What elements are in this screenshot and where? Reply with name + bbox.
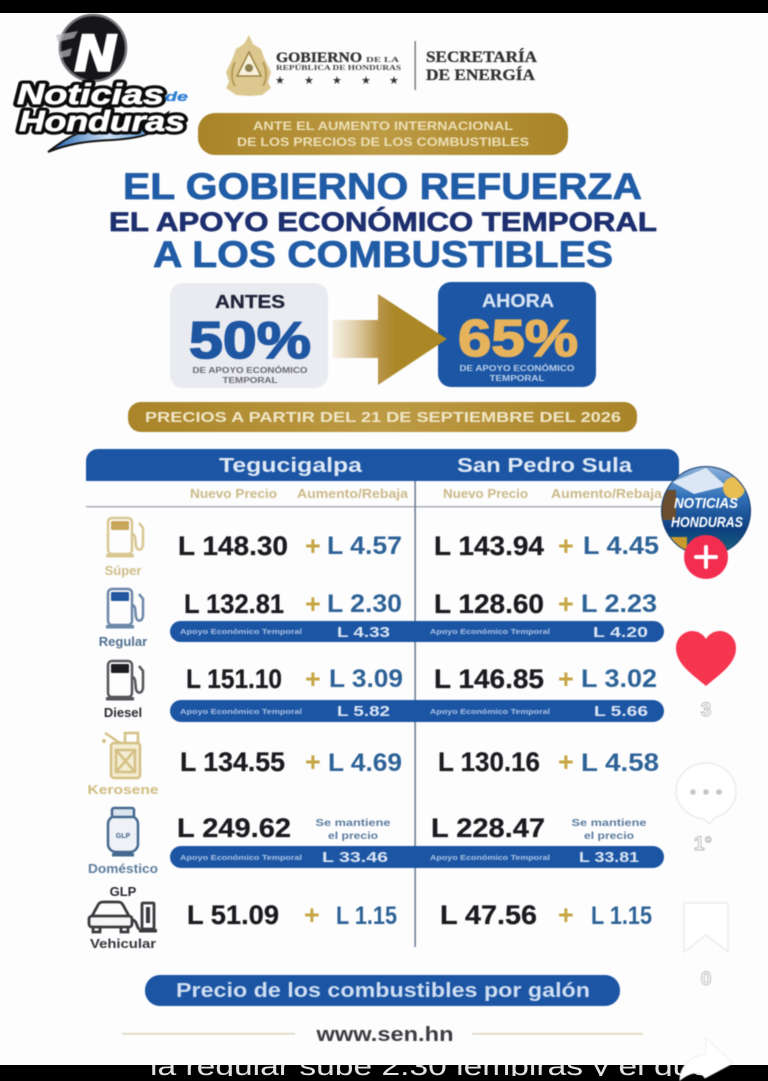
support pill: Regular: L 4.33 bbox=[337, 624, 390, 641]
ministry name: Gobierno: REPÚBLICA DE HONDURAS bbox=[276, 64, 401, 72]
title: A LOS COMBUSTIBLES bbox=[153, 234, 613, 275]
ministry name: Gobierno: GOBIERNO bbox=[276, 50, 362, 66]
support pill: Diesel: L 5.66 bbox=[594, 703, 648, 720]
row: Diesel: Diesel bbox=[104, 705, 142, 720]
row: GLP Vehicular: L 51.09 bbox=[187, 900, 279, 930]
row: GLP Doméstico: L 249.62 bbox=[177, 813, 291, 843]
ministry name: Gobierno: ★ bbox=[361, 75, 371, 87]
icon: heart bbox=[676, 631, 736, 686]
support pill: Diesel: Apoyo Económico Temporal bbox=[430, 709, 550, 716]
row: Súper: L 143.94 bbox=[434, 531, 544, 561]
icon: channel avatar: NOTICIAS bbox=[674, 495, 738, 512]
comments count: 1° bbox=[694, 834, 712, 855]
icon: bookmark bbox=[684, 903, 728, 952]
logo wordmark: de bbox=[165, 89, 188, 104]
panel: ahora 65%: 65% bbox=[458, 310, 578, 368]
column sub-headings: Nuevo Precio bbox=[190, 486, 277, 501]
row: GLP Doméstico: Se mantiene bbox=[316, 817, 391, 829]
support pill: Regular bbox=[170, 621, 664, 642]
logo wordmark bbox=[17, 79, 188, 138]
icon: kerosene jerry can bbox=[102, 733, 140, 778]
row: GLP Doméstico: L 228.47 bbox=[431, 813, 545, 843]
ministry name: Secretaría de Energía bbox=[426, 47, 537, 84]
row: Regular: L 2.23 bbox=[581, 590, 657, 618]
icon: follow plus bbox=[684, 535, 728, 579]
title: EL APOYO ECONÓMICO TEMPORAL bbox=[109, 206, 657, 237]
icon: blue fuel pump bbox=[106, 589, 143, 628]
ministry name: Secretaría de Energía: DE ENERGÍA bbox=[426, 65, 535, 84]
panel: ahora 65%: DE APOYO ECONÓMICO bbox=[460, 364, 574, 373]
row: Kerosene: Kerosene bbox=[88, 782, 158, 797]
row: Súper bbox=[105, 518, 659, 578]
logo: Noticias de Honduras bbox=[17, 15, 188, 152]
row: Regular: L 2.30 bbox=[327, 590, 402, 618]
ministry name: Gobierno bbox=[275, 50, 401, 87]
row: Súper: L 4.45 bbox=[583, 532, 659, 560]
title: EL GOBIERNO REFUERZA bbox=[123, 166, 642, 207]
row: GLP Doméstico: el precio bbox=[584, 830, 634, 842]
support pill: Doméstico: L 33.46 bbox=[322, 849, 388, 866]
support pill: Regular: L 4.20 bbox=[593, 624, 648, 641]
row: Kerosene: L 4.69 bbox=[328, 749, 402, 777]
icon: share arrow bbox=[680, 1038, 733, 1080]
row: Diesel: + bbox=[305, 664, 321, 694]
row: Kerosene: + bbox=[558, 747, 574, 777]
saves count: 0 bbox=[701, 969, 711, 990]
icon: national crest bbox=[226, 35, 271, 96]
icon: N badge bbox=[56, 15, 126, 83]
gold banner: effective date: PRECIOS A PARTIR DEL 21 DE SEPTIEMBRE DEL 2026 bbox=[145, 409, 621, 426]
gold banner: international increase: DE LOS PRECIOS DE LOS COMBUSTIBLES bbox=[237, 137, 529, 149]
icon: N badge: N bbox=[74, 25, 118, 83]
row: GLP Vehicular: L 1.15 bbox=[336, 902, 397, 930]
row: Regular: + bbox=[305, 589, 321, 619]
website: www.sen.hn bbox=[315, 1024, 454, 1046]
logo wordmark: Honduras bbox=[19, 106, 185, 138]
row: Súper: + bbox=[558, 531, 574, 561]
column sub-headings: Aumento/Rebaja bbox=[551, 486, 663, 501]
footer banner: price per gallon bbox=[145, 975, 620, 1006]
row: Súper: L 4.57 bbox=[327, 532, 402, 560]
row: GLP Doméstico: Doméstico bbox=[88, 861, 158, 876]
panel: ahora 65%: TEMPORAL bbox=[490, 374, 545, 383]
row: Diesel: L 146.85 bbox=[434, 664, 544, 694]
row: Regular: + bbox=[558, 589, 574, 619]
panel: ahora 65% bbox=[438, 282, 596, 387]
ministry name: Gobierno: DE LA bbox=[366, 56, 399, 64]
row: Kerosene: + bbox=[305, 747, 321, 777]
support pill: Doméstico bbox=[170, 846, 664, 868]
caption text: bottom subtitle bbox=[0, 1065, 768, 1081]
column sub-headings: Aumento/Rebaja bbox=[297, 486, 409, 501]
row: GLP Vehicular: L 47.56 bbox=[440, 900, 537, 930]
gold banner: international increase bbox=[198, 113, 568, 155]
row: Súper: + bbox=[305, 531, 321, 561]
row: Kerosene: L 4.58 bbox=[581, 749, 659, 777]
icon: black fuel pump bbox=[106, 661, 143, 700]
table header: cities bbox=[86, 449, 679, 481]
row: Diesel: + bbox=[558, 664, 574, 694]
row: GLP Vehicular: GLP bbox=[110, 884, 137, 899]
support pill: Diesel: Apoyo Económico Temporal bbox=[180, 709, 302, 716]
government logo and ministry header bbox=[226, 35, 537, 96]
row: GLP Vehicular: + bbox=[304, 900, 320, 930]
support pill: Regular: Apoyo Económico Temporal bbox=[180, 629, 302, 636]
logo wave bbox=[48, 113, 168, 152]
panel: antes 50%: ANTES bbox=[215, 292, 285, 312]
icon: channel avatar bbox=[660, 466, 752, 556]
caption text: bottom subtitle: la regular sube 2.30 lempiras y el que bbox=[150, 1051, 710, 1081]
gold banner: effective date bbox=[128, 402, 637, 432]
row: Regular bbox=[99, 589, 664, 649]
icon: gas cylinder bbox=[108, 808, 138, 856]
icon: gas cylinder: GLP bbox=[116, 833, 131, 840]
row: Kerosene: L 134.55 bbox=[180, 747, 285, 777]
support pill: Diesel bbox=[170, 700, 664, 722]
table header: cities: Tegucigalpa bbox=[219, 455, 363, 477]
social sidebar bbox=[660, 466, 752, 1080]
row: Súper: L 148.30 bbox=[178, 531, 288, 561]
icon: channel avatar: HONDURAS bbox=[671, 514, 743, 531]
icon: comment bubble bbox=[676, 763, 736, 824]
row: GLP Doméstico: Se mantiene bbox=[572, 817, 647, 829]
support pill: Doméstico: Apoyo Económico Temporal bbox=[180, 855, 302, 862]
row: Regular: L 132.81 bbox=[184, 589, 284, 619]
icon: gold fuel pump bbox=[106, 518, 143, 558]
price table bbox=[86, 449, 679, 951]
row: Diesel: L 151.10 bbox=[186, 664, 282, 694]
row: Kerosene bbox=[88, 733, 659, 797]
panel: antes 50% bbox=[170, 283, 328, 388]
ministry name: Secretaría de Energía: SECRETARÍA bbox=[426, 47, 537, 66]
ministry name: Gobierno: ★ bbox=[332, 75, 342, 87]
table header: cities: San Pedro Sula bbox=[457, 455, 633, 477]
support pill: Doméstico: Apoyo Económico Temporal bbox=[430, 855, 550, 862]
row: Regular: L 128.60 bbox=[434, 589, 544, 619]
logo wordmark: Noticias bbox=[17, 79, 164, 111]
ministry name: Gobierno: ★ bbox=[389, 75, 399, 87]
logo wordmark: Honduras bbox=[19, 106, 185, 138]
row: GLP Vehicular bbox=[89, 884, 652, 951]
support pill: Doméstico: L 33.81 bbox=[579, 849, 639, 866]
panel: ahora 65%: AHORA bbox=[482, 291, 554, 311]
row: Diesel: L 3.02 bbox=[581, 665, 657, 693]
panel: antes 50%: DE APOYO ECONÓMICO bbox=[192, 366, 308, 375]
column sub-headings: Nuevo Precio bbox=[443, 486, 528, 501]
title bbox=[109, 166, 657, 275]
row: GLP Doméstico bbox=[88, 808, 664, 876]
support pill: Regular: Apoyo Económico Temporal bbox=[430, 629, 550, 636]
arrow bbox=[333, 294, 447, 385]
ministry name: Gobierno: ★ bbox=[304, 75, 314, 87]
likes count: 3 bbox=[701, 700, 711, 721]
footer banner: price per gallon: Precio de los combustibles por galón bbox=[176, 980, 590, 1002]
panel: antes 50%: 50% bbox=[189, 312, 311, 370]
gold banner: international increase: ANTE EL AUMENTO INTERNACIONAL bbox=[253, 121, 513, 133]
support pill: Diesel: L 5.82 bbox=[337, 703, 390, 720]
ministry name: Gobierno: ★ bbox=[275, 75, 285, 87]
logo wordmark: Noticias bbox=[17, 79, 164, 111]
row: Kerosene: L 130.16 bbox=[438, 747, 540, 777]
icon: car and gas pump bbox=[89, 902, 157, 932]
row: GLP Vehicular: + bbox=[558, 900, 574, 930]
column sub-headings bbox=[190, 486, 663, 501]
row: GLP Doméstico: el precio bbox=[328, 830, 378, 842]
row: Súper: Súper bbox=[105, 563, 141, 578]
row: GLP Vehicular: L 1.15 bbox=[591, 902, 652, 930]
row: Diesel bbox=[104, 661, 664, 722]
row: GLP Vehicular: Vehicular bbox=[90, 936, 156, 951]
row: Regular: Regular bbox=[99, 634, 147, 649]
panel: antes 50%: TEMPORAL bbox=[222, 376, 278, 385]
row: Diesel: L 3.09 bbox=[329, 665, 403, 693]
